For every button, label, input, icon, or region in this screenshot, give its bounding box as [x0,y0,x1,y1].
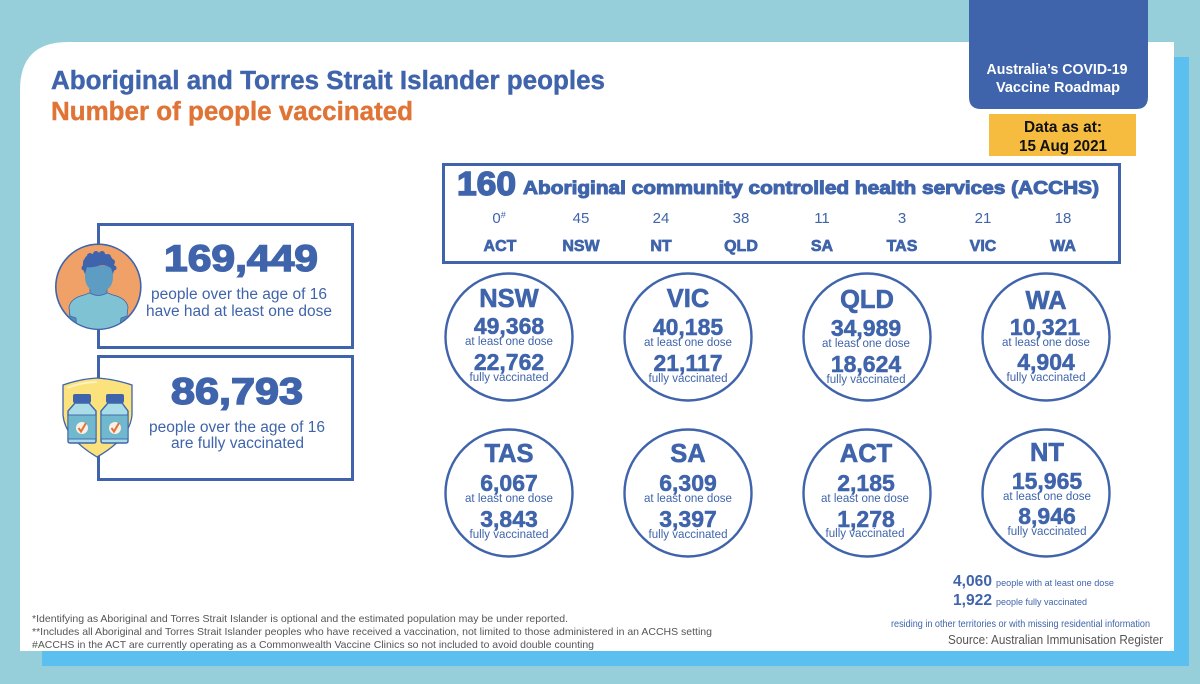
ACCHS counts row: 38 [733,210,749,227]
circle: WA: WA [1025,287,1067,315]
other territories note: residing in other territories or with missing residential information [891,619,1150,630]
ACCHS state labels: TAS [887,238,918,255]
circle: SA: 3,397 [659,506,717,532]
circle: NSW [446,274,572,400]
circle: NSW: fully vaccinated [470,370,549,384]
ACCHS counts row: 18 [1055,210,1071,227]
circle: QLD: 34,989 [831,315,901,341]
icon: shield with vials [63,378,132,457]
other territories note [891,573,1150,630]
circle: VIC: 21,117 [653,350,723,376]
circle: NSW: NSW [479,285,540,313]
tab: roadmap [969,0,1148,109]
circle: ACT: ACT [840,440,893,468]
footnotes [32,614,712,651]
circle: WA: 4,904 [1017,349,1075,375]
circle: QLD: 18,624 [831,351,901,377]
circle: NT: fully vaccinated [1008,524,1087,538]
ACCHS counts row: 45 [573,210,589,227]
circle: TAS: at least one dose [465,491,553,505]
circle: NSW: 49,368 [474,313,544,339]
circle: NT: at least one dose [1003,489,1091,503]
circle: NSW: at least one dose [465,334,553,348]
ACCHS state labels: NSW [562,238,601,255]
circle: SA: 6,309 [659,470,717,496]
panel: at least one dose: 169,449 [164,237,318,279]
circle: QLD [804,274,930,400]
hair [82,251,116,274]
circle: WA: at least one dose [1002,335,1090,349]
ACCHS state labels: WA [1050,238,1076,255]
ACCHS state labels: QLD [724,238,758,255]
other territories note: 4,060 [953,573,992,590]
footnotes: *Identifying as Aboriginal and Torres Strait Islander is optional and the estimated population may be under reported. [32,614,568,625]
panel: fully vaccinated [98,356,352,480]
other territories note: 1,922 [953,592,992,609]
circle: QLD: at least one dose [822,336,910,350]
ACCHS counts row: 21 [975,210,991,227]
title: Aboriginal and Torres Strait Islander peoples [51,67,605,95]
vial right [101,394,128,443]
footnotes: **Includes all Aboriginal and Torres Strait Islander peoples who have received a vaccination, not limited to those administered in an ACCHS setting [32,627,712,638]
panel: ACCHS counts: Aboriginal community controlled health services (ACCHS) [523,177,1099,198]
ACCHS state labels: VIC [970,238,997,255]
circle: TAS: fully vaccinated [470,527,549,541]
circle: VIC [624,274,752,400]
panel: fully vaccinated: are fully vaccinated [171,435,304,452]
tab: roadmap: Australia’s COVID-19 [986,62,1128,78]
circle: SA: at least one dose [644,491,732,505]
circle: NT: NT [1030,439,1064,467]
circle: QLD: fully vaccinated [826,372,906,386]
vial left [68,394,96,443]
data date badge: 15 Aug 2021 [1019,138,1107,155]
ACCHS state labels: ACT [484,238,517,255]
ACCHS counts row: 24 [653,210,669,227]
circle: ACT: 2,185 [837,470,895,496]
ACCHS state labels: NT [650,238,672,255]
circle: WA [982,274,1110,400]
panel: ACCHS counts [444,164,1120,262]
circle: TAS: 3,843 [480,506,538,532]
other territories note: people with at least one dose [996,578,1114,589]
circle: SA [624,430,752,556]
source: Source: Australian Immunisation Register [948,633,1163,647]
ACCHS counts row: # [501,210,507,220]
circle: VIC: 40,185 [653,314,723,340]
circle: TAS [446,430,572,556]
panel: at least one dose [98,224,352,348]
icon: person [56,244,141,332]
ACCHS state labels: SA [811,238,834,255]
circle: TAS: 6,067 [480,470,538,496]
circle: NSW: 22,762 [474,349,544,375]
panel: at least one dose: have had at least one dose [146,303,332,320]
ACCHS counts row [492,210,1071,227]
ACCHS counts row: 0 [492,210,501,227]
panel: fully vaccinated: people over the age of 16 [149,419,325,436]
circle: WA: 10,321 [1010,314,1080,340]
data date badge [989,114,1136,156]
circle: NT: 15,965 [1012,468,1082,494]
panel: fully vaccinated: 86,793 [171,370,303,412]
circle: ACT: 1,278 [837,506,895,532]
circle: WA: fully vaccinated [1006,370,1086,384]
circle: VIC: fully vaccinated [648,371,728,385]
circle: ACT: fully vaccinated [826,526,905,540]
circle: QLD: QLD [840,286,894,314]
subtitle: Number of people vaccinated [51,98,413,126]
circle: NT [982,430,1110,556]
panel: ACCHS counts: 160 [457,165,516,202]
circle: VIC: VIC [667,285,709,313]
data date badge: Data as at: [1024,119,1102,136]
circle: ACT: at least one dose [821,491,909,505]
circle: VIC: at least one dose [644,335,732,349]
ACCHS counts row: 11 [814,210,830,227]
ACCHS state labels [484,238,1076,255]
other territories note: people fully vaccinated [996,597,1087,608]
circle: SA: fully vaccinated [648,527,728,541]
circle: SA: SA [670,440,706,468]
footnotes: #ACCHS in the ACT are currently operating as a Commonwealth Vaccine Clinics so not included to avoid double counting [32,640,594,651]
tab: roadmap: Vaccine Roadmap [996,80,1120,96]
circle: TAS: TAS [484,440,534,468]
circle: ACT [804,430,930,556]
panel: at least one dose: people over the age of 16 [151,286,327,303]
circle: NT: 8,946 [1018,503,1076,529]
ACCHS counts row: 3 [898,210,906,227]
